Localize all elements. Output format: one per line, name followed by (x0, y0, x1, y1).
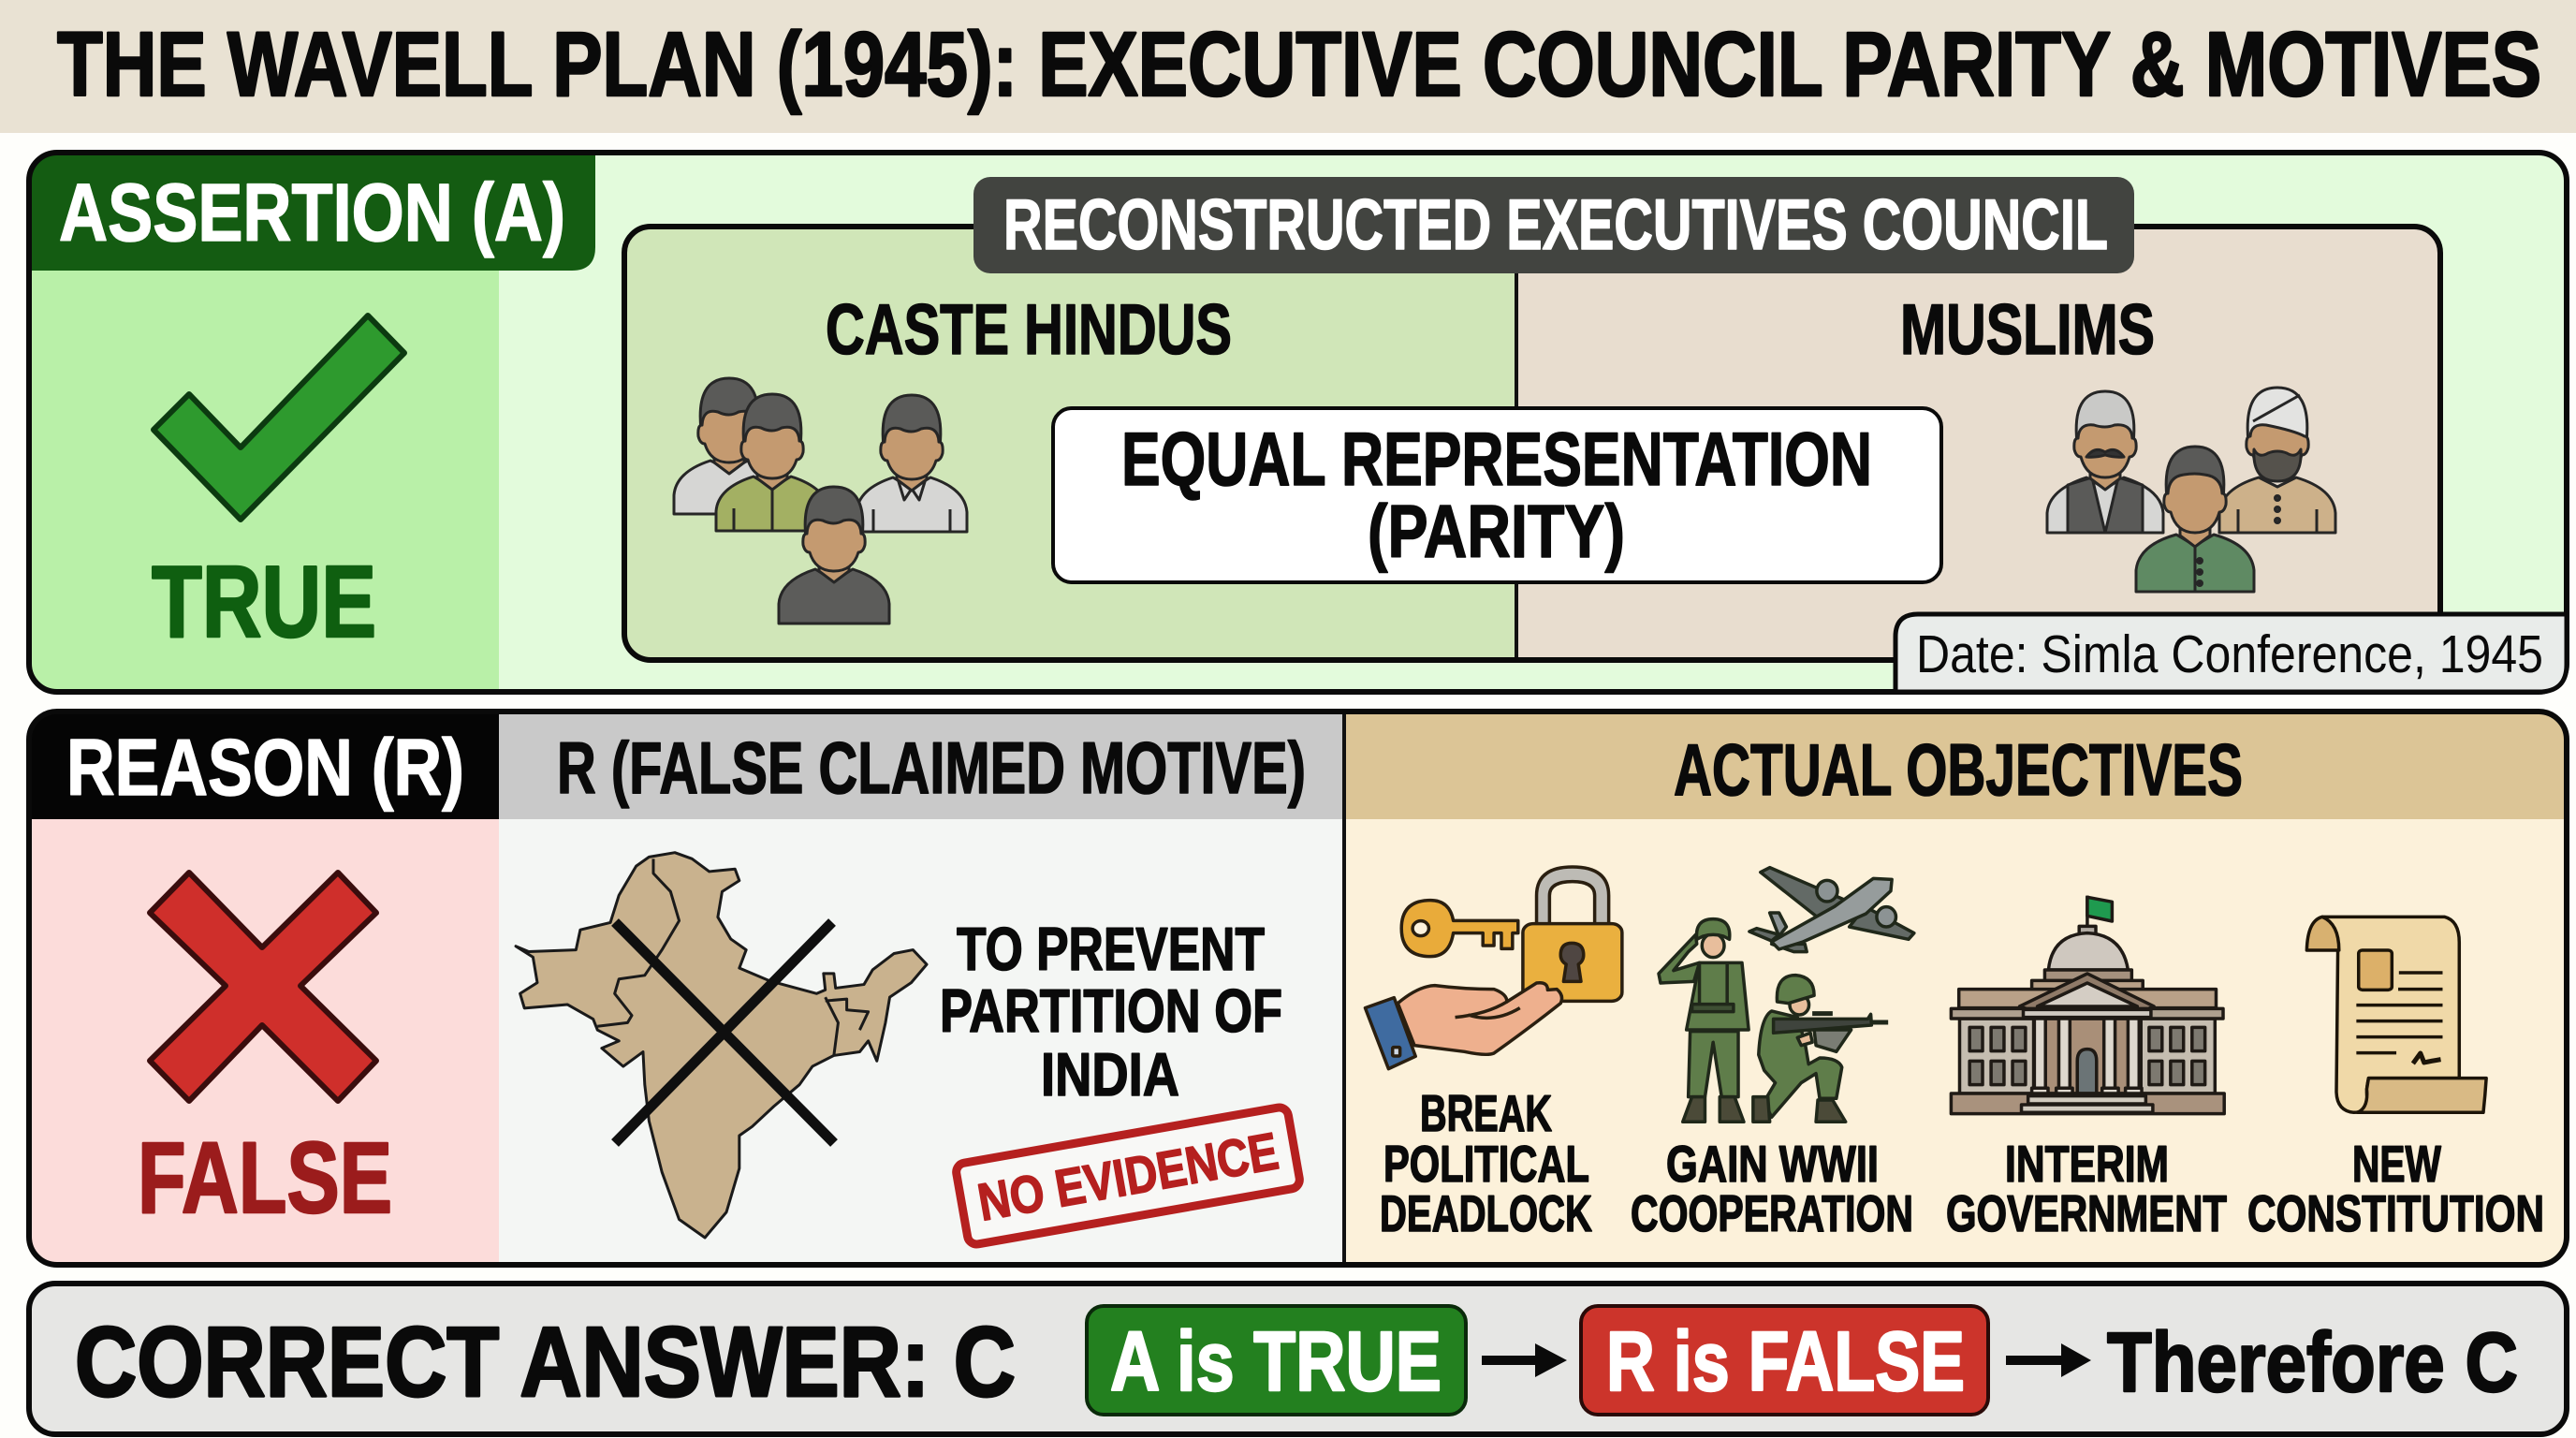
icon: muslim group (2047, 388, 2335, 592)
callout: equal representation: EQUAL REPRESENTATION (1121, 418, 1872, 502)
stamp: no evidence: NO EVIDENCE (973, 1121, 1282, 1232)
council diagram (624, 177, 2440, 660)
verdict: false: FALSE (138, 1121, 392, 1234)
label: caste hindus: CASTE HINDUS (826, 290, 1232, 370)
objective: break political deadlock: DEADLOCK (1380, 1184, 1592, 1242)
arrow (2006, 1343, 2091, 1377)
council heading (973, 177, 2134, 273)
text: to prevent partition of india: INDIA (1041, 1040, 1179, 1108)
badge: a is true: A is TRUE (1110, 1315, 1442, 1409)
objective: break political deadlock: POLITICAL (1383, 1135, 1589, 1193)
objective: interim government (1946, 896, 2227, 1242)
icon: caste hindu group (674, 378, 967, 624)
map of india crossed out (516, 853, 927, 1238)
objective: gain wwii cooperation: COOPERATION (1631, 1184, 1913, 1242)
panel: reason (29, 712, 2567, 1265)
actual objectives heading: ACTUAL OBJECTIVES (1674, 728, 2243, 811)
panel: assertion (29, 153, 2567, 692)
callout: equal representation: (PARITY) (1368, 490, 1625, 573)
objective: gain wwii cooperation: GAIN WWII (1666, 1135, 1879, 1193)
icon: green check mark (154, 315, 404, 520)
icon: key lock and hand (1365, 867, 1622, 1069)
callout: equal representation (1053, 408, 1941, 582)
text: to prevent partition of india (940, 915, 1282, 1108)
badge: r is false: R is FALSE (1606, 1315, 1965, 1409)
objective: new constitution (2247, 917, 2544, 1242)
panel: correct answer (29, 1284, 2567, 1434)
objective: gain wwii cooperation (1631, 868, 1914, 1242)
label: muslims: MUSLIMS (1900, 290, 2155, 370)
objective: interim government: INTERIM (2005, 1135, 2169, 1193)
conclusion text: Therefore C (2107, 1316, 2518, 1410)
icon: soldiers and plane (1659, 868, 1914, 1122)
objective: interim government: GOVERNMENT (1946, 1184, 2227, 1242)
objective: new constitution: NEW (2352, 1135, 2441, 1193)
false motive heading: R (FALSE CLAIMED MOTIVE) (557, 726, 1306, 809)
arrow (1482, 1343, 1567, 1377)
icon: government building (1951, 896, 2224, 1114)
verdict: true: TRUE (152, 545, 376, 659)
answer heading: CORRECT ANSWER: C (75, 1307, 1016, 1417)
icon: red cross (150, 873, 376, 1101)
reason heading: REASON (R) (66, 724, 464, 813)
text: to prevent partition of india: PARTITION OF (940, 976, 1282, 1045)
objective: break political deadlock (1365, 867, 1622, 1242)
council heading: RECONSTRUCTED EXECUTIVES COUNCIL (1003, 185, 2108, 265)
objective: break political deadlock: BREAK (1420, 1084, 1552, 1142)
assertion heading: ASSERTION (A) (59, 168, 565, 258)
text: to prevent partition of india: TO PREVENT (957, 915, 1265, 983)
icon: constitution scroll (2306, 917, 2486, 1112)
